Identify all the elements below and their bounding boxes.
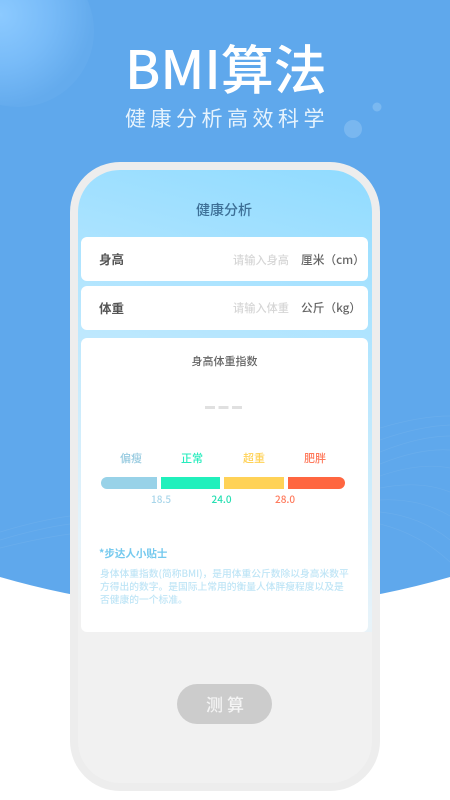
tips text: 否健康的一个标准。 xyxy=(100,592,188,606)
panel: weight input xyxy=(81,286,368,330)
tips text: 方得出的数字。是国际上常用的衡量人体胖瘦程度以及是 xyxy=(100,579,344,593)
subtitle: 健康分析高效科学 xyxy=(125,103,329,133)
bar segment: normal xyxy=(161,477,220,489)
tips text xyxy=(100,566,349,606)
height label: 身高 xyxy=(99,249,124,268)
measure button: 测算 xyxy=(206,691,248,716)
threshold 18.5: 18.5 xyxy=(151,491,171,506)
tips heading: *步达人小贴士 xyxy=(99,546,167,561)
bar segment: obese xyxy=(288,477,345,489)
panel: BMI result xyxy=(81,338,368,632)
category: obese: 肥胖 xyxy=(304,450,326,466)
result heading: 身高体重指数 xyxy=(192,353,258,369)
weight placeholder: 请输入体重 xyxy=(233,300,289,316)
screen header gradient xyxy=(78,170,372,632)
measure button xyxy=(177,684,272,724)
empty result placeholder xyxy=(205,406,242,408)
bar segment: overweight xyxy=(224,477,284,489)
title: BMI算法 xyxy=(125,29,327,105)
threshold 24.0: 24.0 xyxy=(212,491,232,506)
panel: height input xyxy=(81,237,368,281)
bar segment: underweight xyxy=(101,477,157,489)
tips text: 身体体重指数(简称BMI)，是用体重公斤数除以身高米数平 xyxy=(100,566,349,580)
BMI scale xyxy=(101,450,345,506)
category: underweight: 偏瘦 xyxy=(120,450,142,466)
category: overweight: 超重 xyxy=(243,450,265,466)
screen heading: 健康分析 xyxy=(196,200,252,220)
weight label: 体重 xyxy=(99,298,124,317)
height placeholder: 请输入身高 xyxy=(233,252,289,268)
phone screen xyxy=(78,170,372,783)
category: normal: 正常 xyxy=(181,450,203,466)
phone mockup xyxy=(70,162,380,791)
height unit: 厘米（cm） xyxy=(301,250,365,268)
threshold 28.0: 28.0 xyxy=(275,491,295,506)
weight unit: 公斤（kg） xyxy=(301,299,361,316)
